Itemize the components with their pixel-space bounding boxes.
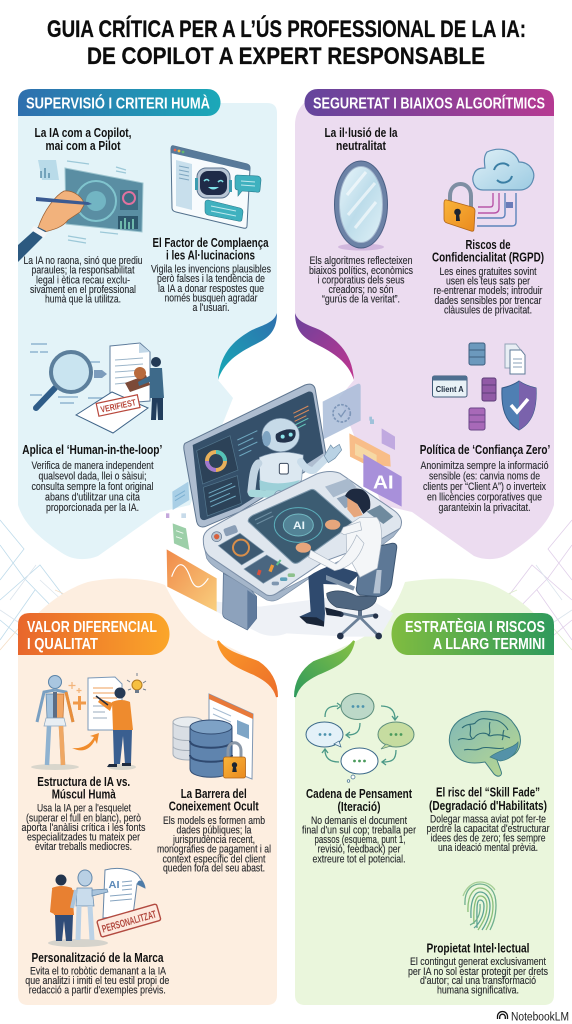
central illustration: professional at AI workstation [166, 384, 402, 639]
panel: seguretat i biaixos algorítmics [295, 89, 554, 559]
text: personalització de la marca: redacció a partir d'exemples previs. [29, 985, 166, 997]
text: la IA com a copilot [24, 125, 142, 306]
icon: zero trust servers and shield: Client A [436, 385, 464, 394]
monitor [184, 384, 327, 527]
heading pill: estratègia: A LLARG TERMINI [433, 636, 545, 653]
text: barrera del coneixement: queden fora del seu abast. [163, 863, 265, 875]
icon: mirror [334, 161, 388, 250]
text: la IA com a copilot: La IA no raona, sinó que prediu [24, 255, 142, 267]
text: cadena de pensament: passos (esquema, punt 1, [314, 834, 406, 846]
text: factor de complaença: Vigila les invencions plausibles [151, 264, 271, 276]
text: human in the loop: qualsevol dada, llei o sàisui; [38, 471, 146, 483]
heading pill: estratègia: ESTRATÈGIA I RISCOS [405, 619, 545, 636]
text: barrera del coneixement: context específic del client [162, 853, 266, 865]
heading pill: valor diferencial: VALOR DIFERENCIAL [27, 619, 157, 636]
text: il·lusió de la neutralitat [309, 125, 413, 306]
floating cards: AI [373, 472, 394, 493]
heading pill: seguretat [304, 89, 554, 116]
text: propietat intel·lectual: d'autor; cal una transformació [420, 975, 536, 987]
text: propietat intel·lectual [408, 940, 548, 997]
text: riscos de confidencialitat: re-entrenar models; introduir [434, 285, 543, 297]
text: il·lusió de la neutralitat: La il·lusió de la [324, 125, 398, 140]
title: DE COPILOT A EXPERT RESPONSABLE [87, 43, 485, 70]
text: cadena de pensament: (Iteració) [338, 799, 380, 814]
text: cadena de pensament: Cadena de Pensament [306, 786, 412, 801]
text: riscos de confidencialitat: Les eines gratuites sovint [440, 266, 536, 278]
text: la IA com a copilot: sivament en el professional [30, 284, 136, 296]
text: barrera del coneixement [157, 786, 271, 875]
text: barrera del coneixement: La Barrera del [181, 786, 247, 801]
man at console [296, 488, 397, 639]
text: personalització de la marca [25, 950, 169, 997]
text: human in the loop: abans d'utilitzar una cita [45, 491, 141, 503]
icon: padlock and cloud [444, 149, 534, 231]
text: human in the loop [22, 442, 162, 514]
icon: skeleton, document and person [31, 673, 146, 770]
icon: browser with robot chatbot [171, 146, 261, 228]
text: factor de complaença: i les Al·lucinacions [166, 248, 255, 262]
text: estructura de IA: (superar el full en blanc), però [26, 812, 141, 824]
icon: zero trust servers and shield [432, 343, 536, 430]
floor shadow [190, 593, 393, 637]
icon: brain [449, 711, 520, 776]
panel: valor diferencial i qualitat [18, 579, 277, 1005]
text: human in the loop: proporcionada per la IA. [46, 502, 139, 514]
console desk: AI [293, 520, 305, 532]
text: personalització de la marca: que analitzi i imiti el teu estil propi de [25, 975, 169, 987]
text: il·lusió de la neutralitat: i corporatius dels seus [318, 274, 405, 286]
text: factor de complaença: la IA a donar respostes que [158, 283, 264, 295]
text: la IA com a copilot: humà que la utilitza. [45, 294, 121, 306]
heading pill: supervisió [18, 89, 220, 116]
text: la IA com a copilot: mai com a Pilot [46, 138, 121, 153]
text: confiança zero: en llicències corporatives que [427, 491, 542, 503]
icon: magnifier, document and stamping person [30, 343, 164, 433]
text: riscos de confidencialitat: dades sensibles por trencar [434, 295, 542, 307]
desk leg [223, 573, 257, 630]
head [347, 497, 363, 517]
text: riscos de confidencialitat: clàusules de privacitat. [444, 305, 532, 317]
text: propietat intel·lectual: humana significativa. [437, 985, 519, 997]
text: personalització de la marca: Personalització de la Marca [32, 950, 164, 965]
text: estructura de IA: Usa la IA per a l'esquelet [37, 803, 131, 815]
icon: magnifier, document and stamping person: VERIFIEST [100, 397, 137, 415]
text: estructura de IA: evitar treballs mediocres. [35, 841, 132, 853]
heading pill: supervisió: SUPERVISIÓ I CRITERI HUMÀ [26, 94, 210, 112]
text: estructura de IA: Múscul Humà [52, 786, 116, 801]
text: skill fade [426, 785, 550, 854]
text: riscos de confidencialitat: usen els teus sats per [446, 276, 530, 288]
robot [251, 418, 342, 499]
text: confiança zero: garanteixin la privacitat. [438, 502, 530, 514]
text: personalització de la marca: Evita el to robòtic demanant a la IA [30, 966, 167, 978]
icon: person, robot and personalised stamp: AI [108, 880, 120, 891]
icon: person, robot and personalised stamp: PERSONALITZAT [101, 908, 158, 935]
text: factor de complaença: a l'usuari. [192, 302, 230, 314]
text: il·lusió de la neutralitat: biaixos polítics, econòmics [309, 265, 413, 277]
office chair [327, 543, 397, 639]
text: skill fade: una ideació mental prèvia. [438, 842, 538, 854]
text: propietat intel·lectual: Propietat Intel·lectual [426, 940, 530, 955]
text: il·lusió de la neutralitat: creadors; no són [328, 284, 394, 296]
text: estructura de IA: aporta l'anàlisi crítica i les fonts [22, 822, 146, 834]
text: la IA com a copilot: paraules; la responsabilitat [32, 265, 134, 277]
panel: estratègia i riscos a llarg termini [295, 579, 554, 1005]
panel: supervisió i criteri humà [18, 89, 277, 559]
text: barrera del coneixement: Coneixement Ocult [169, 799, 259, 814]
text: la IA com a copilot: La IA com a Copilot, [34, 125, 132, 140]
heading pill: valor diferencial: I QUALITAT [27, 636, 98, 653]
text: human in the loop: Aplica el ‘Human-in-the-loop’ [22, 442, 162, 457]
icon: fingerprint [463, 882, 496, 930]
text: barrera del coneixement: Els models es formen amb [163, 815, 265, 827]
text: cadena de pensament: extreure tot el potencial. [312, 853, 406, 865]
text: il·lusió de la neutralitat: neutralitat [336, 138, 386, 153]
icon: iteration thought bubbles [306, 694, 414, 782]
text: barrera del coneixement: monografies de pagament i al [157, 844, 271, 856]
icon: person, robot and personalised stamp [48, 868, 161, 947]
text: barrera del coneixement: dades públiques; la [176, 824, 252, 836]
trousers and shoes [299, 565, 360, 626]
text: factor de complaença: només busquen agradar [164, 292, 258, 304]
text: cadena de pensament: final d'un sul cop; treballa per [302, 824, 416, 836]
text: il·lusió de la neutralitat: “gurús de la veritat”. [322, 294, 400, 306]
text: estructura de IA [22, 774, 146, 853]
text: confiança zero [420, 442, 550, 514]
text: riscos de confidencialitat [432, 237, 544, 317]
floating cards [166, 384, 402, 612]
text: estructura de IA: Estructura de IA vs. [37, 774, 130, 789]
text: riscos de confidencialitat: Riscos de [466, 237, 510, 252]
text: factor de complaença [151, 235, 271, 314]
text: human in the loop: consulta sempre la font original [32, 481, 154, 493]
title [47, 15, 526, 70]
heading pill: valor diferencial [18, 613, 170, 655]
console desk [203, 471, 401, 601]
text: human in the loop: Verifica de manera independent [32, 460, 154, 472]
hands [325, 520, 340, 530]
text: cadena de pensament: No demanis el document [311, 815, 407, 827]
text: estructura de IA: especialitzades tu mateix per [27, 832, 140, 844]
icon: hand with pen on tablet [18, 160, 143, 262]
text: factor de complaença: però falses i la tendència de [157, 273, 265, 285]
shirt [346, 517, 382, 577]
text: il·lusió de la neutralitat: Els algoritmes reflecteixen [310, 255, 412, 267]
heading pill: estratègia [392, 613, 554, 655]
text: factor de complaença: El Factor de Complaença [152, 235, 269, 250]
text: cadena de pensament: revisió, feedback) per [318, 844, 401, 856]
text: la IA com a copilot: legal i ètica recau exclu- [36, 274, 130, 286]
text: barrera del coneixement: jurisprudència recent, [172, 834, 255, 846]
text: confiança zero: sensible (es: canvia noms de [429, 471, 540, 483]
icon: database, document and padlock [173, 694, 253, 779]
text: cadena de pensament [302, 786, 416, 865]
background network lines [0, 520, 572, 655]
